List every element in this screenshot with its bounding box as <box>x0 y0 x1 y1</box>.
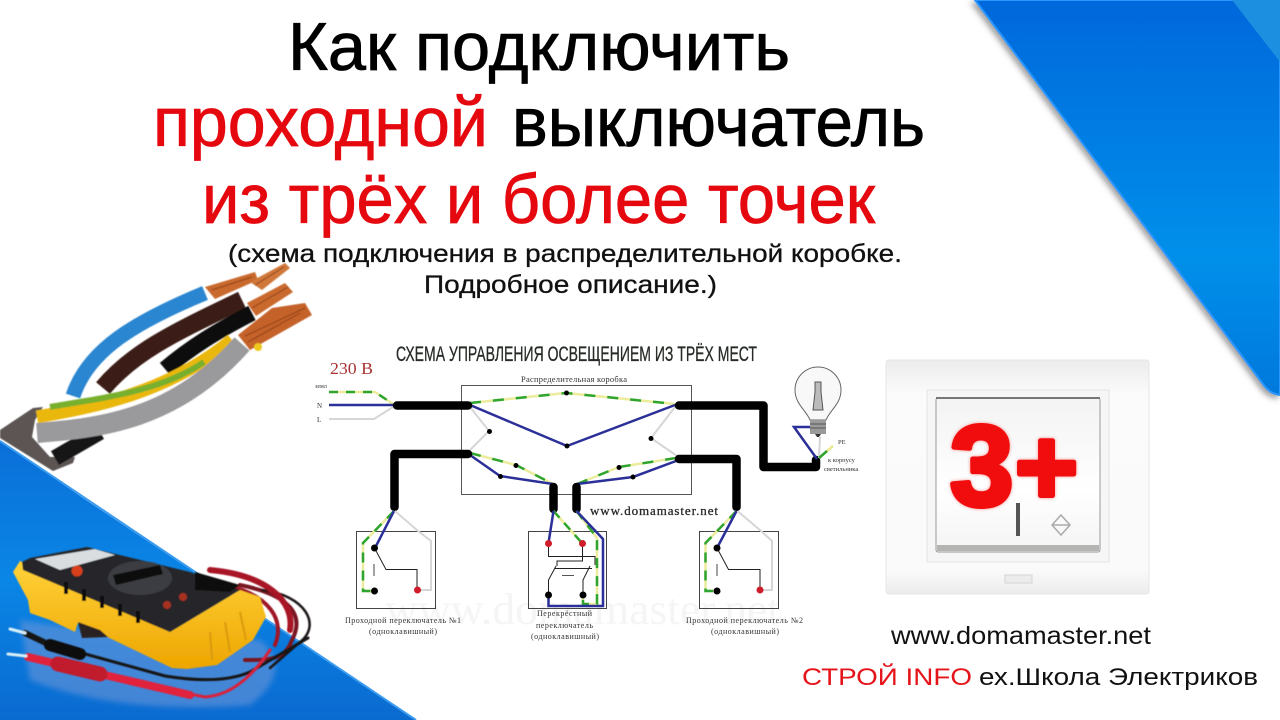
switch 2 caption: Перекрёстный <box>537 609 593 618</box>
title <box>153 9 925 238</box>
switch 1 caption: Проходной переключатель №1 <box>345 616 461 625</box>
switch 3 <box>700 511 778 608</box>
title: проходной <box>153 83 488 161</box>
diagram heading: СХЕМА УПРАВЛЕНИЯ ОСВЕЩЕНИЕМ ИЗ ТРЁХ МЕСТ <box>396 343 757 366</box>
lamp wires <box>794 427 833 459</box>
grip ribs <box>66 582 138 623</box>
input labels: земл <box>315 384 327 390</box>
voltage label: 230 В <box>330 359 373 378</box>
light bulb <box>795 367 841 437</box>
channel name: ех.Школа Электриков <box>979 664 1258 691</box>
switch 3 caption <box>686 616 803 636</box>
distribution box <box>462 386 692 494</box>
test leads <box>8 570 310 697</box>
switch 2 caption: (одноклавишный) <box>531 632 599 641</box>
photo: wall switch <box>886 360 1149 594</box>
lamp labels: PE <box>838 439 846 446</box>
switch 3 caption: (одноклавишный) <box>711 627 779 636</box>
copper strands <box>205 263 312 350</box>
switch 1 <box>356 511 436 608</box>
blue corner panel top right <box>975 0 1280 395</box>
wiring diagram <box>315 343 858 641</box>
channel name <box>802 663 1258 691</box>
switch 2 caption <box>531 609 599 641</box>
3+ badge <box>950 403 1078 530</box>
yellow body <box>13 561 266 669</box>
wires in box <box>329 392 677 484</box>
3+ badge: 3 <box>950 403 1013 530</box>
subtitle <box>228 240 902 299</box>
lamp labels: к корпусу <box>828 457 856 464</box>
input labels: N <box>317 402 322 410</box>
title: из трёх и более точек <box>202 160 875 238</box>
title: Как подключить <box>288 9 790 85</box>
switch 2 <box>528 511 606 608</box>
switch 3 caption: Проходной переключатель №2 <box>686 616 803 625</box>
switch 1 caption <box>345 616 461 636</box>
subtitle: Подробное описание.) <box>424 271 717 299</box>
channel name: СТРОЙ INFO <box>802 663 972 691</box>
photo: multimeter <box>8 547 310 697</box>
display <box>35 549 115 570</box>
input labels <box>315 384 327 424</box>
thick black cables <box>394 406 816 509</box>
rocker marks <box>1016 503 1020 536</box>
subtitle: (схема подключения в распределительной коробке. <box>228 240 902 268</box>
website link: www.domamaster.net <box>890 622 1151 650</box>
diagram website: www.domamaster.net <box>590 503 718 518</box>
lamp labels <box>824 439 858 473</box>
photo: electric cable <box>0 263 312 471</box>
watermark: www.domamaster.net <box>385 585 780 634</box>
3+ badge: + <box>1015 406 1078 527</box>
switch 1 caption: (одноклавишный) <box>369 627 437 636</box>
dial <box>108 561 172 595</box>
distribution box label: Распределительная коробка <box>521 374 627 384</box>
dark face <box>22 547 240 632</box>
junction dots <box>487 390 654 480</box>
input labels: L <box>317 416 321 424</box>
blue corner panel bottom left <box>0 441 416 720</box>
lamp labels: светильника <box>824 466 858 473</box>
switch 2 caption: переключатель <box>536 621 593 630</box>
title: выключатель <box>512 83 925 161</box>
